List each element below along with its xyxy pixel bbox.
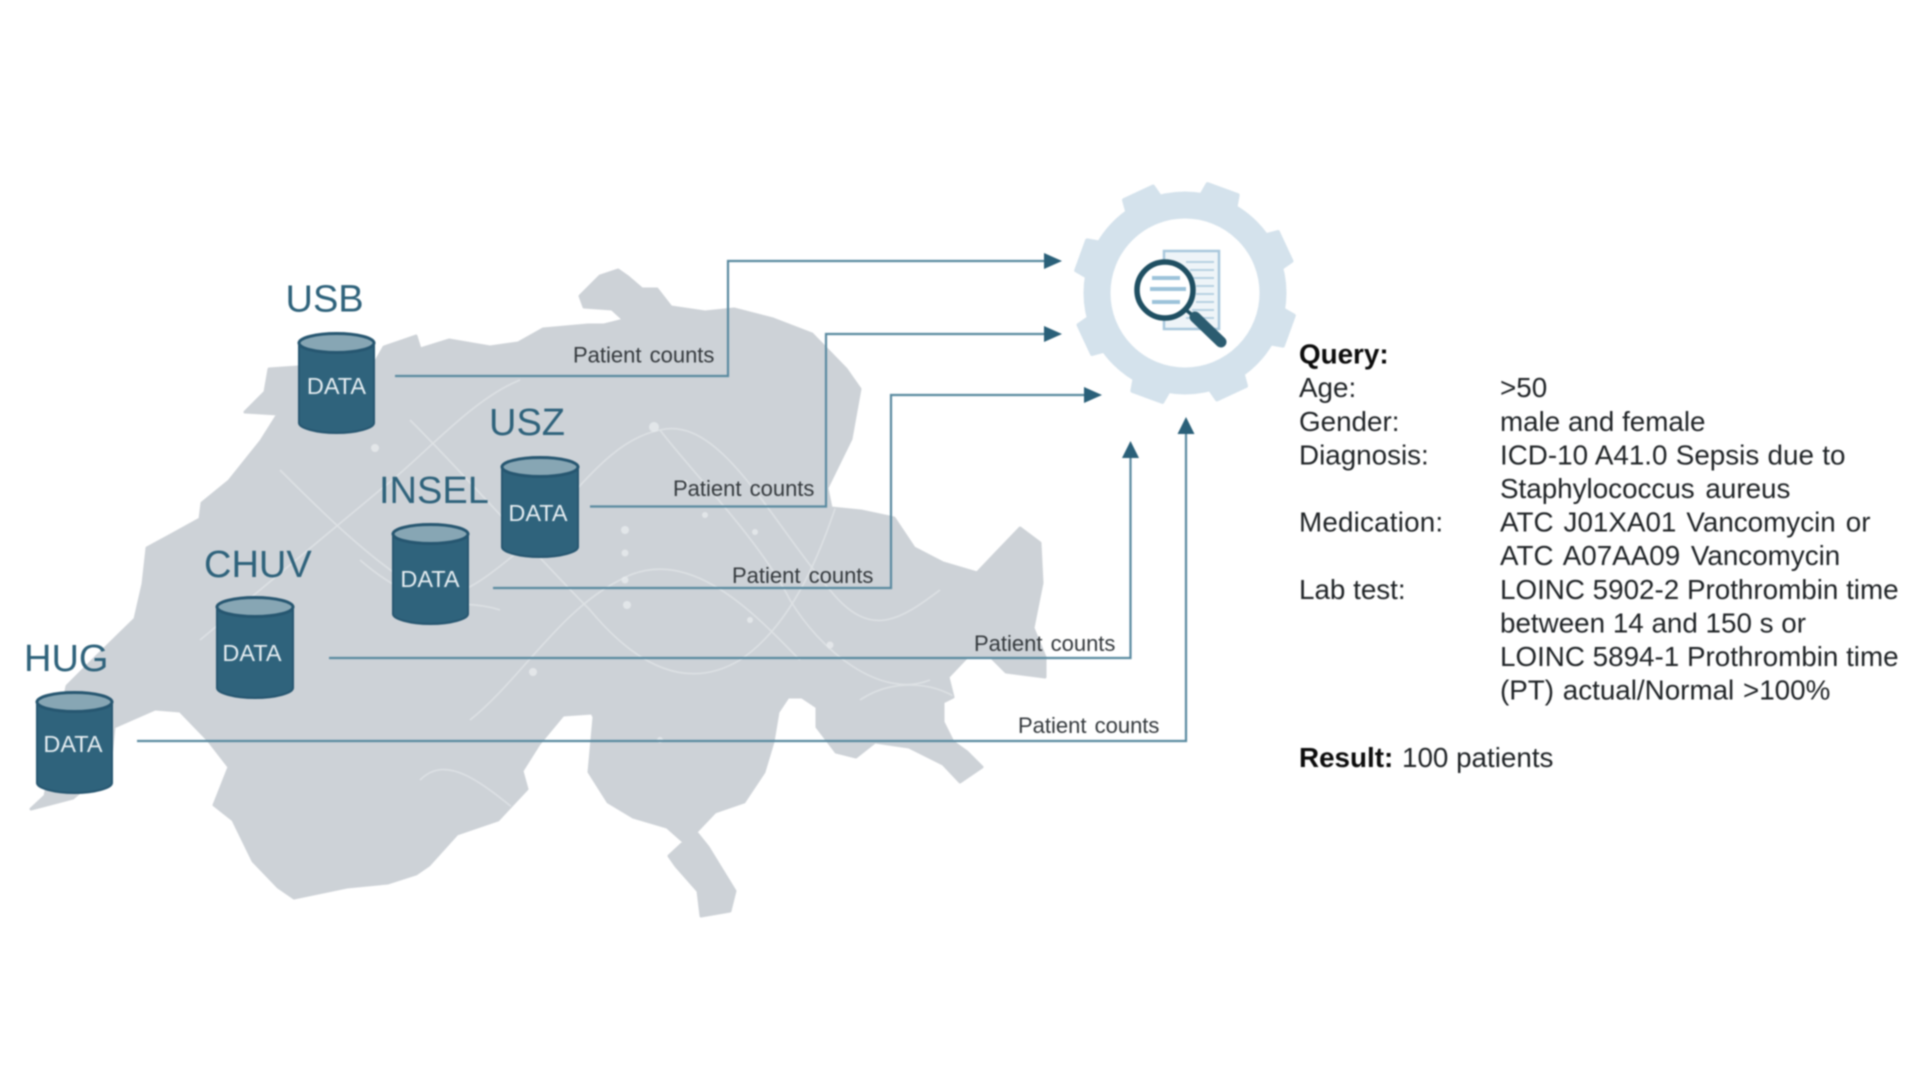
result line: Result: <box>1299 742 1393 773</box>
site: USZ <box>489 402 578 557</box>
site: USZ: USZ <box>489 402 565 444</box>
gear <box>1074 182 1296 404</box>
connector: HUG to gear <box>137 417 1194 741</box>
site: CHUV: DATA <box>222 640 282 666</box>
row: gender <box>1299 406 1706 437</box>
map of Switzerland <box>31 270 1045 916</box>
row: lab test: LOINC 5902-2 Prothrombin time <box>1500 574 1899 605</box>
site: INSEL: DATA <box>400 566 460 592</box>
row: gender: male and female <box>1500 406 1706 437</box>
query panel <box>1299 339 1899 773</box>
row: medication: ATC J01XA01 Vancomycin or <box>1500 507 1870 538</box>
site: USB: DATA <box>307 373 366 399</box>
site: HUG <box>24 638 112 793</box>
row: diagnosis <box>1299 439 1845 504</box>
label: patient counts USZ: Patient counts <box>673 476 814 501</box>
label: patient counts CHUV: Patient counts <box>974 631 1115 656</box>
label: patient counts INSEL: Patient counts <box>732 563 873 588</box>
site: INSEL <box>379 470 489 624</box>
label: patient counts USB: Patient counts <box>573 342 714 368</box>
site: CHUV <box>204 544 312 698</box>
site: USZ: DATA <box>508 500 568 526</box>
row: lab test: LOINC 5894-1 Prothrombin time <box>1500 641 1899 672</box>
row: lab test: Lab test: <box>1299 574 1406 605</box>
row: diagnosis: Staphylococcus aureus <box>1500 473 1790 504</box>
row: age: Age: <box>1299 372 1356 403</box>
connector: USZ to gear <box>590 326 1062 506</box>
result line: 100 patients <box>1402 742 1553 773</box>
heading: query: Query: <box>1299 339 1389 370</box>
row: medication: Medication: <box>1299 507 1443 538</box>
site: INSEL: INSEL <box>379 470 489 512</box>
icon: gear with document and magnifier <box>1074 182 1296 404</box>
result line <box>1299 742 1553 773</box>
document <box>1164 251 1219 329</box>
site: CHUV: CHUV <box>204 544 312 586</box>
row: lab test: (PT) actual/Normal >100% <box>1500 675 1830 706</box>
site: HUG: HUG <box>24 638 108 680</box>
site: USB <box>286 278 374 433</box>
site: HUG: DATA <box>43 731 103 757</box>
row: lab test <box>1299 574 1899 706</box>
row: age <box>1299 372 1547 403</box>
row: lab test: between 14 and 150 s or <box>1500 607 1806 638</box>
row: medication <box>1299 507 1870 571</box>
connector: INSEL to gear <box>493 387 1102 588</box>
row: medication: ATC A07AA09 Vancomycin <box>1500 540 1840 571</box>
magnifier <box>1137 262 1221 342</box>
site: USB: USB <box>286 278 364 320</box>
row: gender: Gender: <box>1299 406 1399 437</box>
connector: CHUV to gear <box>329 441 1139 658</box>
row: diagnosis: Diagnosis: <box>1299 439 1429 470</box>
connector: USB to gear <box>395 253 1062 376</box>
row: age: >50 <box>1500 372 1547 403</box>
label: patient counts HUG: Patient counts <box>1018 713 1159 738</box>
row: diagnosis: ICD-10 A41.0 Sepsis due to <box>1500 439 1845 470</box>
